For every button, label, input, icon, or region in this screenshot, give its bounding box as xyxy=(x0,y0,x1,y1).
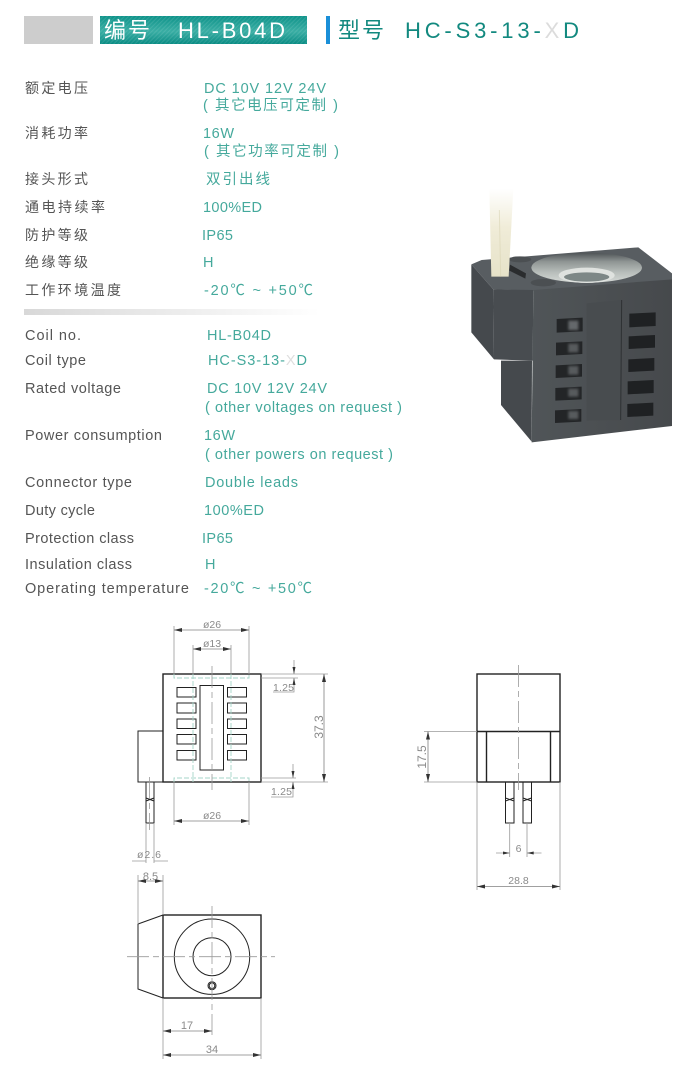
body outline xyxy=(138,674,261,782)
header: coil type: HC-S3-13-XD xyxy=(405,18,579,43)
lead wires xyxy=(506,782,532,857)
English specification table: DC 10V 12V 24V xyxy=(207,381,327,397)
English specification table: 16W xyxy=(204,428,235,444)
Chinese specification table: IP65 xyxy=(202,228,233,244)
body outline xyxy=(127,906,275,1035)
English specification table: 100%ED xyxy=(204,503,264,519)
Chinese specification table: 工作环境温度 xyxy=(25,282,121,298)
English specification table: Operating temperature xyxy=(25,581,189,597)
lead wires xyxy=(489,188,513,277)
dimensions: 28.8 xyxy=(508,875,529,887)
dimensions: 6 xyxy=(516,843,522,855)
Chinese specification table: 防护等级 xyxy=(25,227,88,243)
dimensions: ø13 xyxy=(203,638,221,650)
Chinese specification table: ( 其它电压可定制 ) xyxy=(203,96,338,114)
lead wire xyxy=(146,777,154,830)
Chinese specification table: 100%ED xyxy=(203,200,262,216)
English specification table: -20℃ ~ +50℃ xyxy=(204,581,312,597)
English specification table: Coil no. xyxy=(25,328,81,344)
dimensions xyxy=(415,732,560,890)
Chinese specification table: 绝缘等级 xyxy=(25,254,88,270)
Chinese specification table: 接头形式 xyxy=(25,171,88,187)
dimensions: 8.5 xyxy=(143,871,158,883)
English specification table xyxy=(25,328,402,597)
dimensions: 34 xyxy=(206,1044,218,1056)
English specification table: Power consumption xyxy=(25,428,162,444)
header: coil number banner xyxy=(100,16,307,44)
English specification table: Protection class xyxy=(25,531,134,547)
body outline xyxy=(477,665,560,790)
Chinese specification table: 双引出线 xyxy=(206,171,270,188)
Chinese specification table: H xyxy=(203,255,213,271)
drawing: top view xyxy=(127,871,275,1059)
slots xyxy=(177,688,246,760)
English specification table: Double leads xyxy=(205,475,298,491)
Chinese specification table xyxy=(25,80,339,299)
dimensions: 17.5 xyxy=(415,745,429,769)
header: coil number banner: HL-B04D xyxy=(178,18,285,43)
dimensions: 37.3 xyxy=(312,715,326,739)
Chinese specification table: 通电持续率 xyxy=(25,199,105,215)
Chinese specification table: 消耗功率 xyxy=(25,125,88,141)
English specification table: Insulation class xyxy=(25,557,132,573)
Chinese specification table: DC 10V 12V 24V xyxy=(204,81,326,97)
dimensions: 17 xyxy=(181,1020,193,1032)
English specification table: Connector type xyxy=(25,475,132,491)
section divider xyxy=(24,309,320,315)
Chinese specification table: -20℃ ~ +50℃ xyxy=(204,283,313,299)
English specification table: ( other voltages on request ) xyxy=(205,400,402,416)
English specification table: Duty cycle xyxy=(25,503,95,519)
hidden lines xyxy=(174,666,249,790)
dimensions: ø2.6 xyxy=(137,849,161,861)
header: blue accent bar xyxy=(326,16,330,44)
vent slots xyxy=(555,312,656,423)
product photo: coil block xyxy=(471,188,672,442)
English specification table: ( other powers on request ) xyxy=(205,447,393,463)
drawing: side view xyxy=(415,665,560,890)
Chinese specification table: 16W xyxy=(203,126,234,142)
top recess xyxy=(509,253,642,286)
dimensions: 1.25 xyxy=(271,786,292,798)
English specification table: Coil type xyxy=(25,353,86,369)
Chinese specification table: ( 其它功率可定制 ) xyxy=(204,142,339,160)
header: grey block xyxy=(24,16,93,44)
dimensions: ø26 xyxy=(203,810,221,822)
dimensions: ø26 xyxy=(203,619,221,631)
English specification table: Rated voltage xyxy=(25,381,121,397)
English specification table: HL-B04D xyxy=(207,328,271,344)
Chinese specification table: 额定电压 xyxy=(25,80,88,96)
English specification table: H xyxy=(205,557,215,573)
English specification table: HC-S3-13-XD xyxy=(208,353,307,369)
dimensions: 1.25 xyxy=(273,682,294,694)
dimensions xyxy=(138,871,261,1059)
block body xyxy=(471,247,672,442)
drawing: front view xyxy=(132,619,328,863)
header: coil number banner: 编号 xyxy=(104,18,150,43)
dimensions xyxy=(132,619,328,863)
header: coil type: 型号 xyxy=(338,18,384,43)
English specification table: IP65 xyxy=(202,531,233,547)
